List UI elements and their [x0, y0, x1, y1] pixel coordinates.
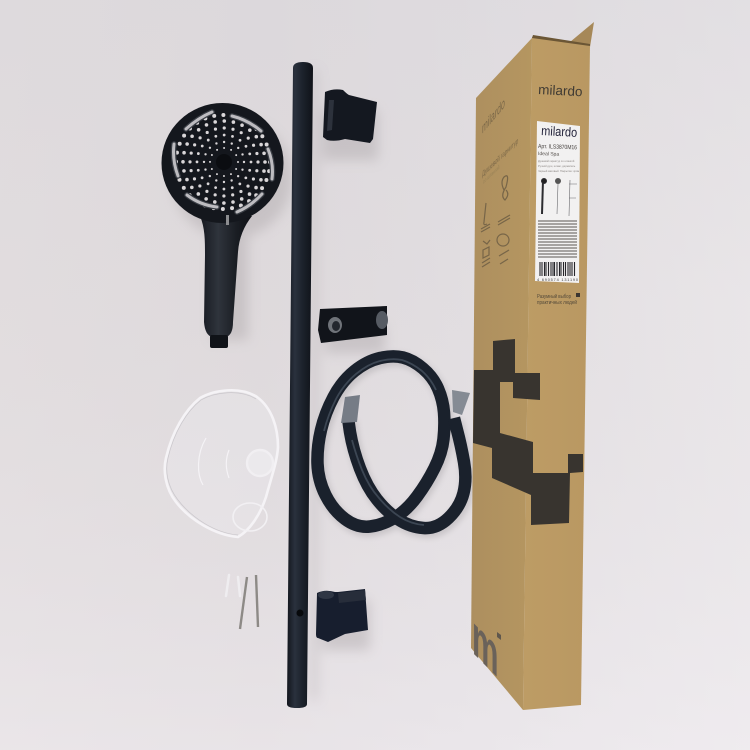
dish rim: [165, 390, 278, 537]
front brand name: milardo: [538, 82, 583, 99]
icon: shower head: [481, 203, 490, 232]
open flap: [570, 22, 594, 47]
centre hub: [216, 154, 232, 170]
suction cup: [247, 450, 273, 476]
label description: Ручной душ, шланг, держатель: [538, 164, 576, 168]
hose loop: [317, 356, 444, 527]
product label: [535, 121, 580, 283]
mode slider: [226, 215, 229, 225]
side brand name: milardo: [482, 94, 505, 137]
handle: [200, 216, 252, 337]
slogan: [537, 293, 580, 306]
middle sliding bracket: [318, 306, 388, 343]
outer slots: [174, 112, 272, 212]
hose connector right: [452, 390, 470, 415]
left screw: [240, 577, 247, 629]
label description: Черный матовый. Покрытие: хром: [538, 169, 579, 173]
ribs: [198, 438, 229, 485]
hose strand: [348, 418, 465, 528]
series name: Ideal Spa: [538, 151, 559, 158]
label brand name: milardo: [541, 123, 578, 140]
side feature icons: [481, 176, 510, 267]
round spray face: [162, 103, 284, 223]
slogan: практичных людей: [537, 299, 577, 306]
product box: [471, 22, 594, 710]
dark pixel pattern: [473, 339, 583, 525]
slogan: Разумный выбор: [537, 293, 571, 300]
contact shadows: [172, 70, 385, 700]
screws and wall plugs: [226, 575, 258, 629]
box side face: [471, 38, 532, 710]
box front face: [523, 37, 590, 710]
icon: box: [482, 240, 490, 267]
fine print block: [538, 221, 577, 257]
screw hole: [296, 610, 304, 616]
slide rail: [287, 62, 313, 708]
hose nozzle: [210, 335, 228, 348]
side product title: Душевой гарнитур: [482, 136, 518, 179]
icon: hose: [498, 176, 510, 225]
label description: [538, 159, 579, 173]
right screw: [256, 575, 258, 627]
rod: [287, 62, 313, 708]
dish oval: [233, 503, 267, 531]
side face text: [482, 94, 518, 186]
hose connector left: [341, 395, 360, 423]
spray nozzle rings: [176, 115, 270, 209]
product diagram: [542, 178, 577, 216]
wall plugs: [226, 575, 240, 596]
bottom wall bracket: [316, 589, 368, 642]
article number: Арт. ILS3870M16: [538, 144, 578, 151]
hose shadow: [319, 359, 467, 531]
side product subtitle: со штангой: [483, 163, 499, 186]
soap dish: [165, 390, 278, 537]
barcode: [540, 262, 574, 276]
icon: round clock: [497, 234, 509, 246]
shower head: [162, 103, 284, 348]
top opening: [532, 35, 590, 46]
barcode digits: 4 690574 131190: [537, 278, 578, 282]
label description: Душевой гарнитур со штангой: [538, 159, 575, 163]
top wall bracket: [323, 89, 377, 143]
hose: [317, 356, 470, 531]
m logo: m: [472, 599, 498, 691]
